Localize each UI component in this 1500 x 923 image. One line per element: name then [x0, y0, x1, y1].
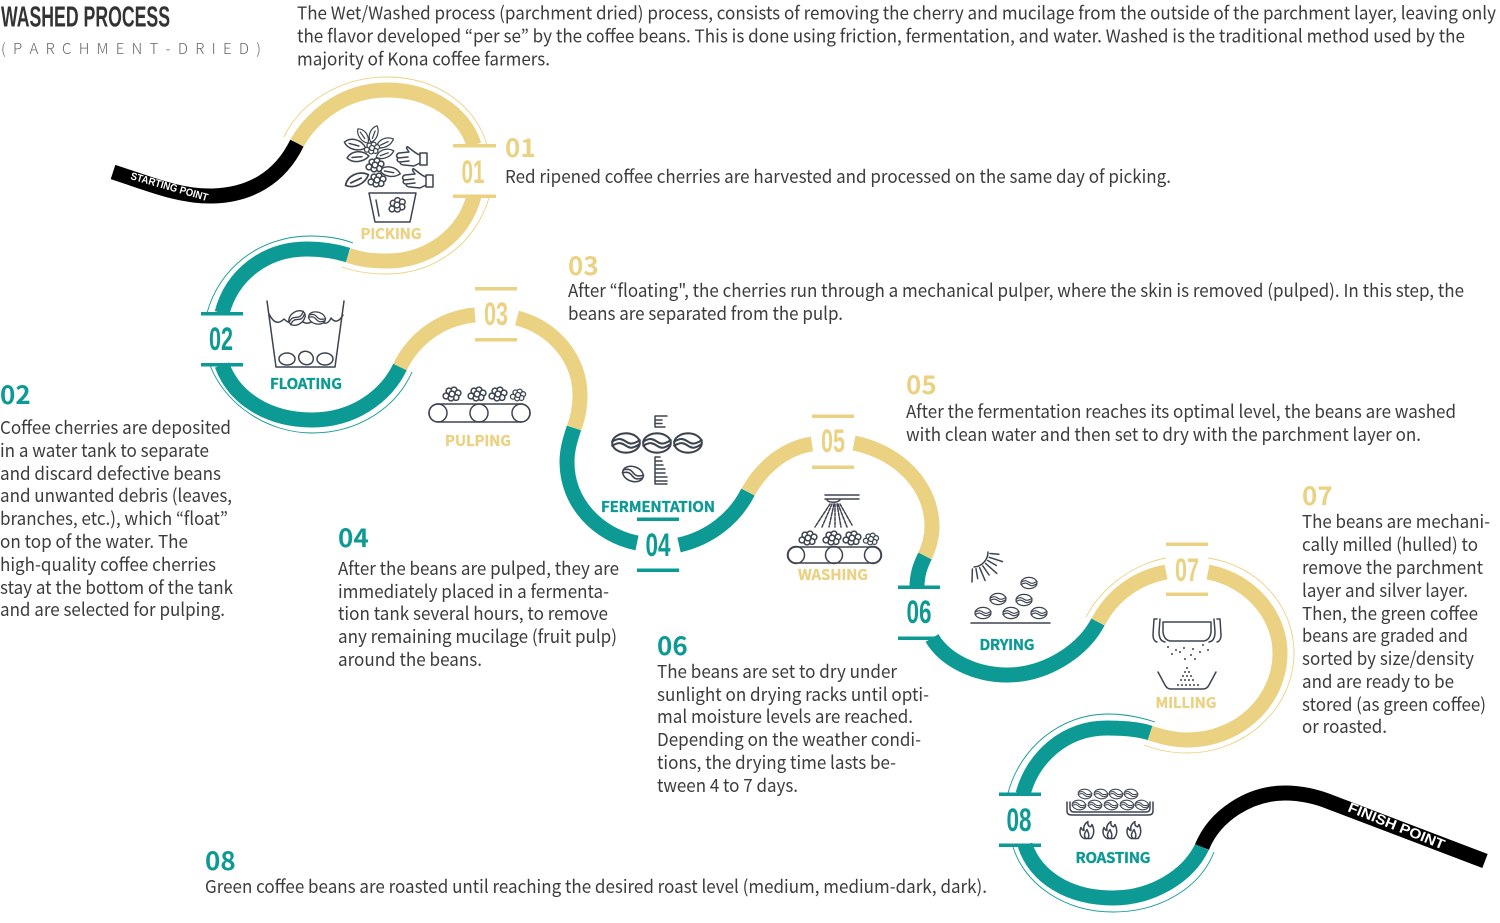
step 03 ribbon	[400, 287, 580, 428]
step 04 ribbon	[567, 428, 748, 572]
step 01 ribbon	[284, 77, 496, 274]
text block: step 06: mal moisture levels are reached.	[657, 703, 913, 729]
label: milling: MILLING	[1156, 692, 1216, 713]
text block: step 02: 02	[0, 375, 31, 412]
text block: step 07: beans are graded and	[1302, 622, 1468, 648]
icon: fermentation	[612, 416, 702, 484]
intro text block: majority of Kona coffee farmers.	[297, 46, 550, 72]
text block: step 07: layer and silver layer.	[1302, 577, 1468, 603]
text block: step 07: cally milled (hulled) to	[1302, 531, 1478, 557]
step 08 ribbon	[999, 714, 1214, 912]
text block: step 08	[205, 841, 987, 899]
title: WASHED PROCESS	[1, 2, 170, 34]
step 06 ribbon: 06	[906, 594, 932, 630]
icon: roasting	[1067, 788, 1153, 838]
icon: picking	[343, 124, 433, 222]
text block: step 08: Green coffee beans are roasted until reaching the desired roast level (medium, medium-dark, dark).	[205, 873, 987, 899]
start ribbon: STARTING POINT	[129, 170, 210, 204]
text block: step 06: Depending on the weather condi-	[657, 726, 921, 752]
text block: step 02: and unwanted debris (leaves,	[0, 482, 232, 508]
finish ribbon	[1202, 793, 1485, 861]
step 07 ribbon	[1086, 542, 1294, 753]
text block: step 07: remove the parchment	[1302, 554, 1483, 580]
text block: step 07: The beans are mechani-	[1302, 508, 1490, 534]
text block: step 05: with clean water and then set to dry with the parchment layer on.	[906, 421, 1421, 447]
text block: step 02: and are selected for pulping.	[0, 596, 225, 622]
step 05 ribbon: 05	[821, 423, 845, 459]
label: pulping: PULPING	[445, 430, 511, 451]
text block: step 07: Then, the green coffee	[1302, 600, 1478, 626]
text block: step 06: 06	[657, 626, 688, 663]
label: roasting: ROASTING	[1076, 847, 1150, 868]
step 06 ribbon	[898, 556, 1098, 675]
text block: step 04	[338, 518, 619, 672]
step 07 ribbon: 07	[1175, 552, 1199, 588]
label: drying: DRYING	[980, 634, 1034, 655]
text block: step 07: or roasted.	[1302, 713, 1387, 739]
start ribbon	[113, 143, 297, 204]
text block: step 04: After the beans are pulped, they are	[338, 555, 619, 581]
icon: milling	[1153, 619, 1221, 689]
subtitle: ( P A R C H M E N T - D R I E D )	[1, 38, 261, 59]
step 02 ribbon	[201, 236, 412, 433]
text block: step 02: Coffee cherries are deposited	[0, 414, 231, 440]
text block: step 06: tions, the drying time lasts be-	[657, 749, 896, 775]
icon: drying	[971, 552, 1050, 623]
text block: step 05: 05	[906, 365, 937, 402]
text block: step 03: After “floating", the cherries run through a mechanical pulper, where the skin is removed (pulped). In this step, the	[568, 277, 1464, 303]
text block: step 07	[1302, 476, 1490, 739]
text block: step 02: high-quality coffee cherries	[0, 551, 216, 577]
icon: washing	[788, 495, 882, 564]
text block: step 07: 07	[1302, 476, 1333, 513]
text block: step 04: around the beans.	[338, 646, 482, 672]
text block: step 08: 08	[205, 841, 236, 878]
text block: step 06	[657, 626, 929, 798]
step 03 ribbon: 03	[484, 296, 508, 332]
finish ribbon: FINISH POINT	[1346, 799, 1448, 853]
text block: step 05: After the fermentation reaches its optimal level, the beans are washed	[906, 398, 1456, 424]
text block: step 05	[906, 365, 1456, 447]
text block: step 04: any remaining mucilage (fruit pulp)	[338, 623, 617, 649]
text block: step 01: 01	[505, 128, 536, 165]
icon: floating	[267, 301, 344, 367]
text block: step 02: stay at the bottom of the tank	[0, 574, 233, 600]
icon: pulping	[429, 387, 530, 422]
intro text block	[297, 0, 1497, 72]
label: washing: WASHING	[798, 564, 868, 585]
label: picking: PICKING	[360, 223, 422, 244]
step 04 ribbon: 04	[646, 527, 671, 563]
text block: step 03: 03	[568, 246, 599, 283]
step 05 ribbon	[748, 414, 932, 556]
step 08 ribbon: 08	[1006, 802, 1032, 838]
text block: step 01: Red ripened coffee cherries are harvested and processed on the same day of picking.	[505, 163, 1171, 189]
label: floating: FLOATING	[270, 373, 342, 394]
text block: step 04: 04	[338, 518, 369, 555]
text block: step 02	[0, 375, 233, 622]
text block: step 06: sunlight on drying racks until opti-	[657, 681, 929, 707]
text block: step 06: tween 4 to 7 days.	[657, 772, 798, 798]
text block: step 04: tion tank several hours, to remove	[338, 600, 608, 626]
text block: step 06: The beans are set to dry under	[657, 658, 898, 684]
text block: step 04: immediately placed in a fermenta-	[338, 578, 609, 604]
text block: step 07: and are ready to be	[1302, 668, 1454, 694]
text block: step 01	[505, 128, 1171, 189]
text block: step 02: on top of the water. The	[0, 528, 188, 554]
text block: step 03: beans are separated from the pulp.	[568, 300, 843, 326]
text block: step 07: sorted by size/density	[1302, 645, 1475, 671]
step 01 ribbon: 01	[462, 154, 484, 190]
text block: step 02: in a water tank to separate	[0, 437, 209, 463]
text block: step 07: stored (as green coffee)	[1302, 691, 1486, 717]
text block: step 02: branches, etc.), which “float”	[0, 505, 228, 531]
label: fermentation: FERMENTATION	[601, 496, 715, 517]
intro text block: the flavor developed “per se” by the coffee beans. This is done using friction, fermentation, and water. Washed is the traditional method used by the	[297, 22, 1465, 48]
step 02 ribbon: 02	[209, 321, 233, 357]
text block: step 03	[568, 246, 1464, 326]
text block: step 02: and discard defective beans	[0, 460, 221, 486]
